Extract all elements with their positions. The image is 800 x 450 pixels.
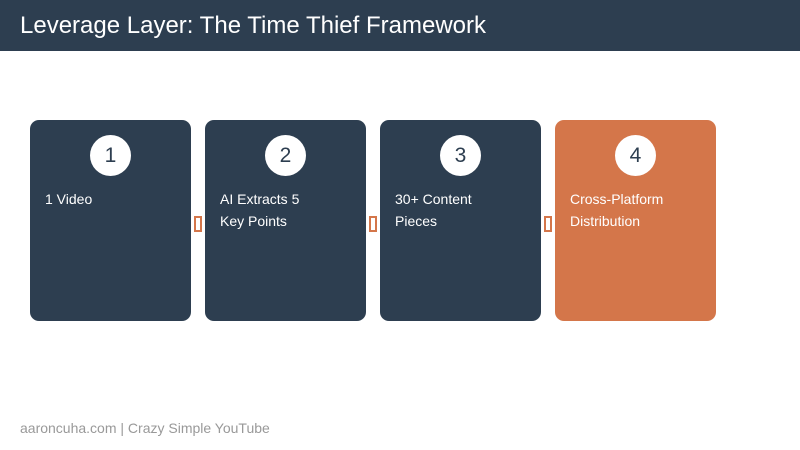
card 4: Cross-Platform <box>570 191 663 207</box>
arrow 1 <box>194 216 202 232</box>
card 3: 30+ Content <box>395 191 472 207</box>
card 3 <box>380 120 541 321</box>
title <box>0 0 800 51</box>
card 1: 1 Video <box>45 191 92 207</box>
card 4: Distribution <box>570 213 640 229</box>
title: Leverage Layer: The Time Thief Framework <box>20 12 486 39</box>
card 3: 3 <box>455 144 466 167</box>
card 3: Pieces <box>395 213 437 229</box>
footer: aaroncuha.com | Crazy Simple YouTube <box>20 420 270 436</box>
card 2: AI Extracts 5 <box>220 191 299 207</box>
card 4 <box>555 120 716 321</box>
card 4: 4 <box>630 144 641 167</box>
card 1: 1 <box>105 144 116 167</box>
card 2 <box>205 120 366 321</box>
arrow 3 <box>544 216 552 232</box>
card 1 <box>30 120 191 321</box>
card 2: 2 <box>280 144 291 167</box>
arrow 2 <box>369 216 377 232</box>
card 2: Key Points <box>220 213 287 229</box>
